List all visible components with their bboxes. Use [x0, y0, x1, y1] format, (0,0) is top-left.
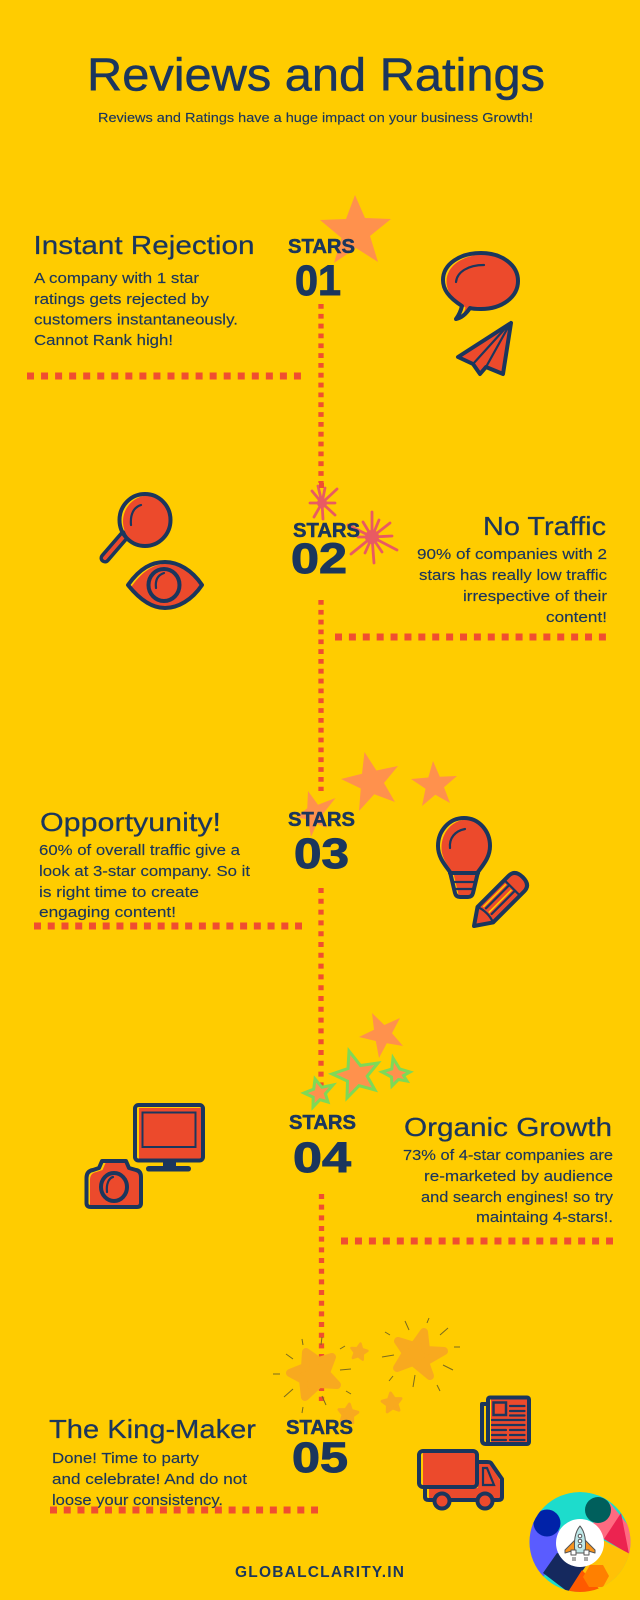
body text: and celebrate! And do not [52, 1471, 248, 1488]
panel: 2 stars [105, 483, 608, 637]
logo badge [530, 1492, 630, 1592]
body text [417, 546, 608, 626]
body text [39, 842, 251, 921]
body text: ratings gets rejected by [34, 291, 210, 308]
icon: speech bubble [443, 253, 522, 320]
panel: 1 star [27, 195, 522, 376]
heading: instant rejection: Instant Rejection [34, 230, 254, 260]
body text: A company with 1 star [34, 270, 199, 287]
body text: loose your consistency. [52, 1492, 223, 1509]
body text: Done! Time to party [52, 1450, 200, 1467]
body text: Cannot Rank high! [34, 332, 173, 349]
star decorations [296, 752, 457, 837]
body text: 73% of 4-star companies are [403, 1147, 613, 1164]
stars label 01: 01 [295, 257, 341, 305]
divider [50, 1506, 318, 1514]
icon: magnifier [105, 494, 174, 558]
body text: and search engines! so try [421, 1189, 614, 1206]
title: Reviews and Ratings [87, 48, 545, 100]
central dotted timeline [318, 304, 324, 1401]
stars label 02 [291, 520, 360, 583]
icon: starbursts [310, 483, 397, 563]
heading: no traffic: No Traffic [483, 511, 606, 541]
stars label 03: 03 [294, 830, 349, 878]
footer website name: GLOBALCLARITY.IN [235, 1564, 404, 1581]
body text: 90% of companies with 2 [417, 546, 607, 563]
stars label 04: STARS [289, 1112, 356, 1134]
stars label 01 [288, 236, 355, 305]
stars label 02: STARS [293, 520, 360, 542]
icon: newspaper [482, 1398, 529, 1444]
icon: pencil [466, 869, 531, 934]
body text: engaging content! [39, 904, 176, 921]
star decorations [304, 1013, 410, 1107]
stars label 01: STARS [288, 236, 355, 258]
divider [341, 1238, 613, 1244]
icon: paper plane [458, 322, 511, 374]
star decoration [320, 195, 391, 263]
body text: stars has really low traffic [419, 567, 608, 584]
heading: the king-maker: The King-Maker [49, 1414, 256, 1444]
body text: customers instantaneously. [34, 312, 238, 328]
icon: camera [86, 1161, 144, 1209]
stars label 05: 05 [292, 1434, 348, 1482]
body text: maintaing 4-stars!. [476, 1209, 613, 1226]
stars label 05 [286, 1417, 353, 1482]
stars label 03 [288, 809, 355, 878]
icon: lightbulb [438, 818, 494, 898]
heading: opportunity: Opportyunity! [40, 807, 221, 837]
body text: look at 3-star company. So it [39, 863, 251, 880]
body text: content! [546, 609, 607, 626]
stars label 04 [289, 1112, 356, 1182]
panel: 3 stars [34, 752, 531, 934]
panel: 4 stars [86, 1013, 614, 1241]
stars label 02: 02 [291, 535, 347, 583]
divider [335, 634, 606, 640]
icon: eye [128, 562, 206, 610]
divider [27, 372, 301, 380]
body text: irrespective of their [463, 588, 607, 605]
icon: rocket [565, 1526, 595, 1561]
body text: 60% of overall traffic give a [39, 842, 241, 859]
icon: delivery truck [419, 1451, 502, 1508]
body text [52, 1450, 248, 1509]
body text: re-marketed by audience [424, 1168, 613, 1185]
stars label 04: 04 [293, 1134, 351, 1182]
stars label 03: STARS [288, 809, 355, 831]
body text [403, 1147, 614, 1226]
subtitle: Reviews and Ratings have a huge impact on your business Growth! [98, 110, 533, 125]
panel: 5 stars [49, 1318, 529, 1510]
star decorations [273, 1318, 460, 1423]
icon: monitor [135, 1105, 203, 1172]
body text: is right time to create [39, 884, 199, 901]
stars label 05: STARS [286, 1417, 353, 1439]
heading: organic growth: Organic Growth [404, 1112, 612, 1142]
divider [34, 922, 302, 930]
body text [34, 270, 238, 349]
